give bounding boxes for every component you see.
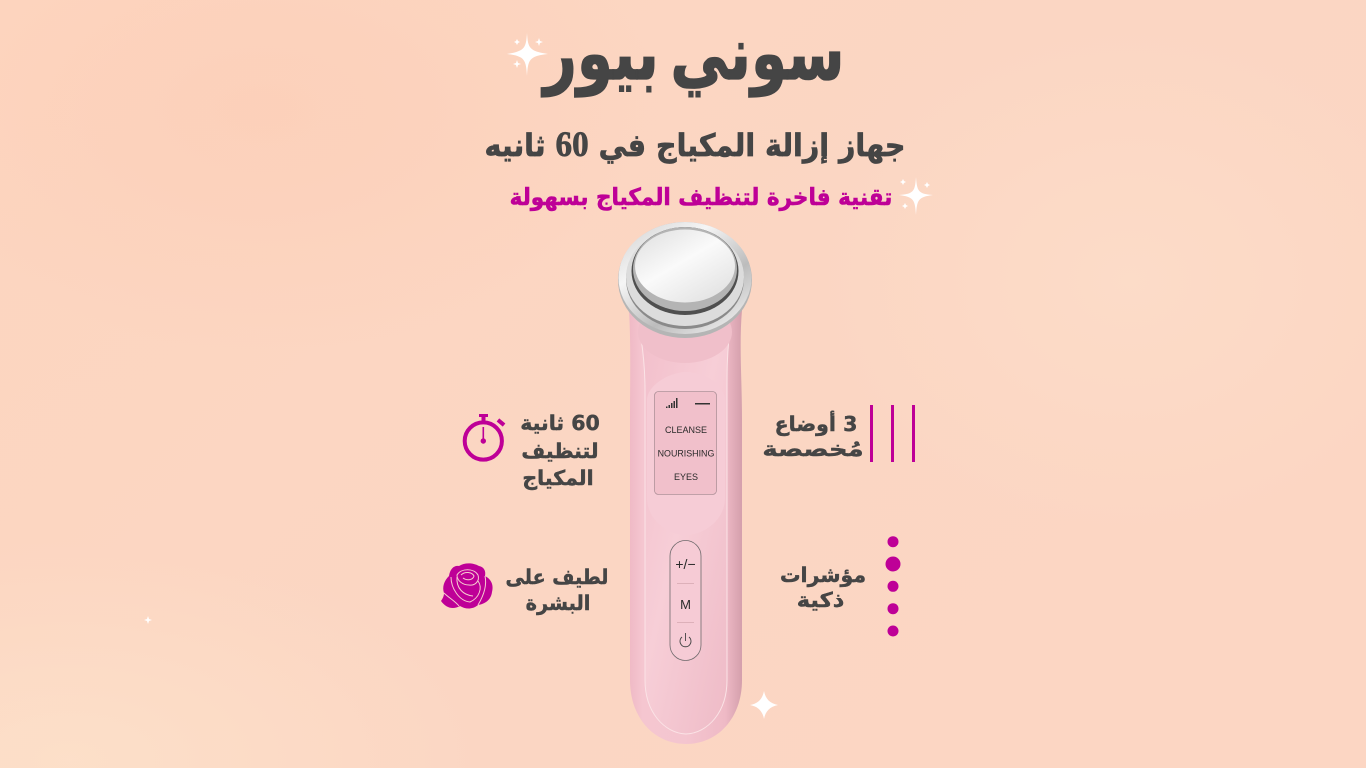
text: gentle on skin (506, 565, 608, 616)
feature: gentle on skin (441, 563, 608, 616)
text: gentle on skin: البشرة (526, 591, 590, 615)
text: 60 seconds (520, 411, 600, 490)
screen (654, 392, 716, 494)
screen: CLEANSE (665, 425, 707, 435)
icon: five dots (886, 536, 900, 636)
text: three modes (762, 410, 863, 461)
screen: EYES (674, 472, 698, 482)
control buttons: +/− (675, 556, 696, 572)
feature: smart indicators (780, 536, 900, 636)
title: سوني بيور (543, 11, 845, 97)
icon: tagline sparkles (900, 178, 932, 214)
control buttons (670, 540, 701, 660)
text: 60 seconds: المكياج (522, 466, 594, 490)
icon: title sparkles (508, 34, 548, 75)
screen: NOURISHING (658, 448, 714, 458)
tagline: تقنية فاخرة لتنظيف المكياج بسهولة (510, 183, 892, 211)
text: three modes: 3 أوضاع (775, 412, 857, 436)
device illustration (618, 222, 752, 744)
text: smart indicators (780, 563, 866, 612)
icon: three bars (870, 405, 915, 462)
icon: small star (144, 616, 152, 624)
icon: stopwatch (462, 414, 506, 462)
text: smart indicators: مؤشرات (780, 563, 866, 587)
control buttons: M (680, 597, 691, 612)
text: 60 seconds: لتنظيف (521, 439, 599, 463)
text: three modes: مُخصصة (762, 437, 863, 461)
text: smart indicators: ذكية (797, 588, 844, 612)
subtitle: جهاز إزالة المكياج في 60 ثانيه (485, 124, 905, 164)
icon: device sparkle (750, 692, 778, 718)
handle (629, 301, 742, 744)
icon: rose (441, 563, 493, 608)
feature: three modes (762, 405, 915, 462)
feature: 60 seconds (462, 411, 600, 490)
text: gentle on skin: لطيف على (506, 565, 608, 589)
metal head (618, 222, 752, 338)
text: 60 seconds: 60 ثانية (520, 411, 600, 435)
